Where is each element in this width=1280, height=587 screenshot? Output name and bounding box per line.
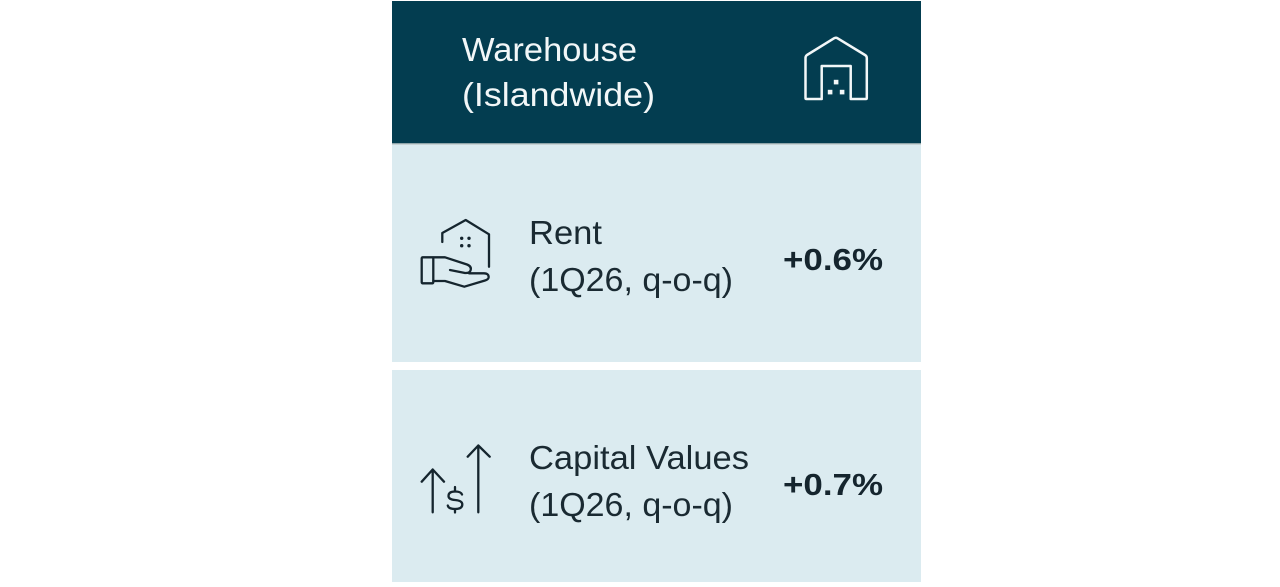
label: capital values: (1Q26, q-o-q): [529, 486, 733, 523]
panel: capital values: [392, 370, 921, 582]
panel: header: [392, 1, 921, 143]
icon: warehouse: [806, 38, 867, 99]
panel: rent: [392, 145, 921, 362]
heading: Warehouse (Islandwide): [462, 31, 655, 113]
value: rent change: +0.6%: [783, 242, 883, 277]
heading: Warehouse (Islandwide): Warehouse: [462, 31, 637, 68]
icon: hand holding house: [422, 220, 489, 287]
label: capital values: [529, 439, 749, 523]
label: capital values: Capital Values: [529, 439, 749, 476]
divider under header: [392, 143, 921, 144]
heading: Warehouse (Islandwide): (Islandwide): [462, 76, 655, 113]
icon: rising arrows with dollar: [422, 446, 490, 512]
label: rent: [529, 214, 733, 298]
value: capital values change: +0.7%: [783, 467, 883, 502]
label: rent: (1Q26, q-o-q): [529, 261, 733, 298]
label: rent: Rent: [529, 214, 602, 251]
